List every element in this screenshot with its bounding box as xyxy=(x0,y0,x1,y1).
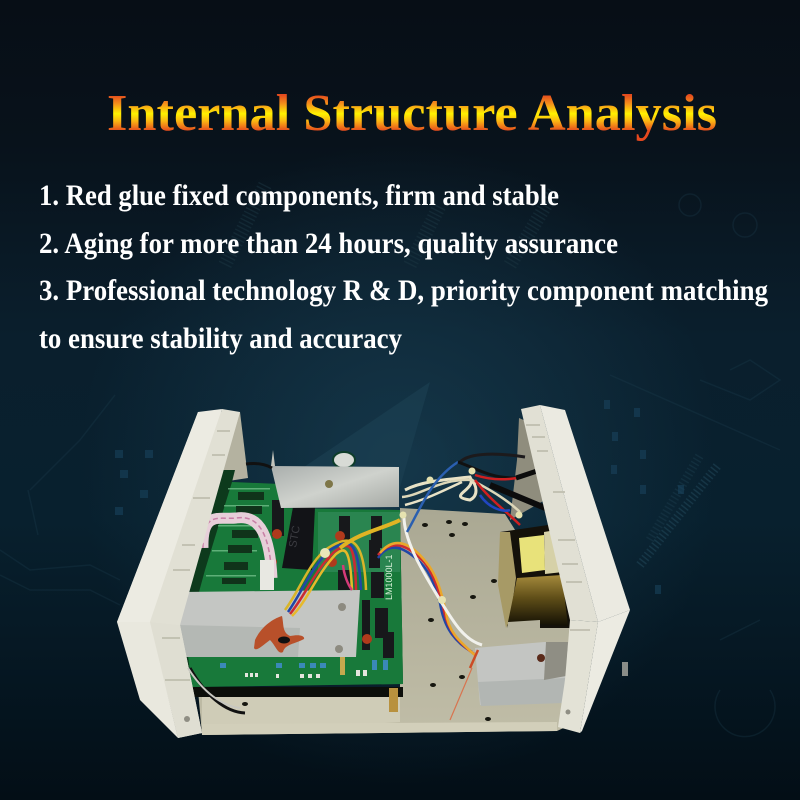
right side wall bracket xyxy=(510,418,545,520)
wire tie xyxy=(320,548,330,558)
pink ribbon cable xyxy=(203,518,274,590)
smaller IC chips xyxy=(272,500,394,658)
coloured wire bundle xyxy=(285,520,400,616)
transformer xyxy=(498,525,572,628)
rear metal bracket and capacitor xyxy=(271,450,399,508)
feature line 3 continued: to ensure stability and accuracy xyxy=(39,322,402,355)
wire ties xyxy=(400,468,522,604)
main STC chip: STC xyxy=(287,525,303,549)
right front panel xyxy=(521,405,630,733)
feature line 1: 1. Red glue fixed components, firm and stable xyxy=(39,179,559,212)
title: Internal Structure Analysis xyxy=(107,85,717,142)
text block: feature list xyxy=(39,179,768,355)
feature line 2: 2. Aging for more than 24 hours, quality assurance xyxy=(39,227,618,260)
device photo: opened instrument xyxy=(117,405,630,738)
green circuit board: LM1000L-1 xyxy=(384,554,394,600)
black rear wire xyxy=(246,464,272,468)
left side wall xyxy=(222,412,248,482)
left front panel xyxy=(117,409,245,738)
red glue capacitors xyxy=(269,529,372,644)
main STC chip xyxy=(282,507,315,570)
blue components row xyxy=(220,660,388,670)
right shield box xyxy=(450,642,568,720)
chassis floor plate xyxy=(198,508,575,735)
front shield box with red glue xyxy=(178,590,360,657)
green circuit board xyxy=(176,470,403,697)
brass standoff xyxy=(340,657,398,712)
right wire bundles to transformer and board xyxy=(378,454,550,656)
